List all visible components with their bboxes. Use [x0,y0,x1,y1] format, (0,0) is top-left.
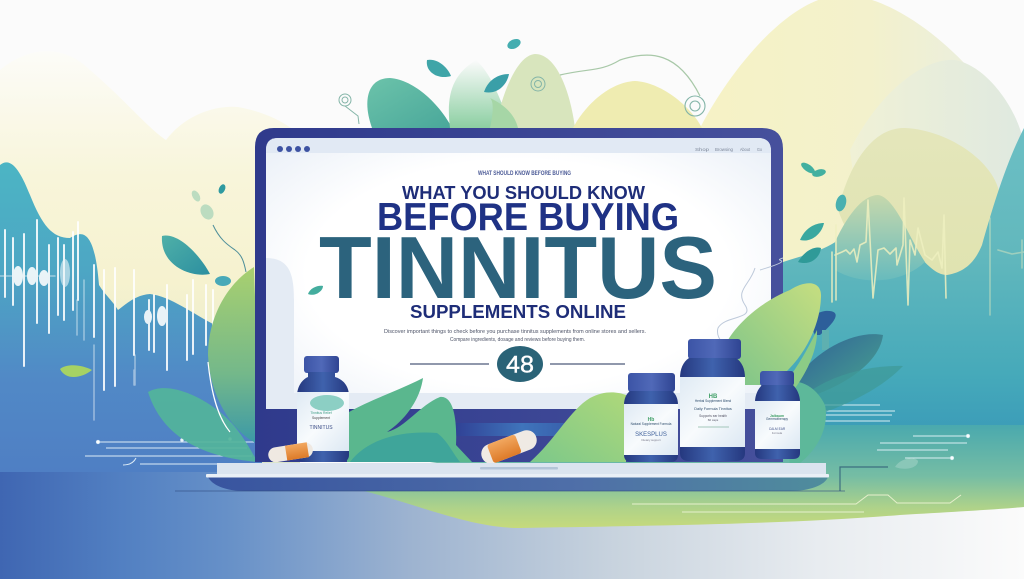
leaves floating left [60,183,246,377]
heartbeat wave right [832,198,1024,315]
title line 1: WHAT YOU SHOULD KNOW [402,183,645,203]
icon: small teal oval [215,276,231,286]
label [624,404,678,455]
bottle 2 [624,373,678,462]
screen lower frame panel [266,258,771,409]
browser menu: Shop [695,147,710,152]
label text: Gemmotherapy [766,417,788,421]
icon: oval leaf [834,193,848,213]
base top [217,463,826,475]
icon: teal leaf upper [800,223,824,241]
eyebrow text: WHAT SHOULD KNOW BEFORE BUYING [478,170,571,177]
screen [266,138,771,409]
label [680,377,745,447]
pale arch inside teal [835,195,925,280]
thin swirl [717,258,783,345]
decorative lines: right [818,405,970,460]
bottle 1 [297,356,349,462]
icon: sprout [799,161,827,178]
label text [309,411,333,431]
top plant cluster [339,37,705,128]
monitor chin band [446,423,636,436]
monitor [255,128,783,462]
olive hill [838,128,1000,280]
label text: Dietary support [642,438,661,442]
lime leaf in front of monitor [728,283,821,400]
ground shadow line [175,490,845,492]
icon: spiral right [685,96,705,116]
label text: Supplement [312,416,330,420]
title line 4: SUPPLEMENTS ONLINE [410,302,626,322]
background hills: left [0,51,300,470]
label mark [310,395,344,411]
circuit line [632,458,961,512]
label text: 60 caps [708,418,719,422]
icon: spiral centre [531,77,545,91]
pill left [267,441,314,463]
label text: Hb [648,417,654,423]
leaf front left [347,378,472,462]
label text [766,414,788,435]
small leaf on screen [308,286,323,295]
number badge: 48 [506,352,534,378]
icon: spiral left [339,94,359,124]
ground blue and white band [0,472,1024,579]
browser menu [695,147,762,152]
leaves floating right [798,161,848,263]
browser dots [277,146,310,152]
soundwave left [0,220,213,420]
base shadow [208,477,828,491]
background hills: right [640,0,1024,300]
body text: Compare ingredients, dosage and reviews before buying them. [450,337,585,343]
number badge [497,346,543,382]
icon: teal leaf small [506,37,522,51]
label text: CALM EAR [769,427,786,431]
bottle 4 [755,371,800,459]
curling stem [560,55,700,96]
stem [213,225,246,272]
body text: Discover important things to check before you purchase tinnitus supplements from online stores and sellers. [384,329,646,335]
icon: large teal leaf [162,236,210,275]
label [755,401,800,449]
monitor frame [255,128,783,462]
icon: teal leaf middle [484,74,509,93]
label text: HB [709,394,718,400]
icon: teal leaf top [427,60,451,77]
label text: SKESPLUS [635,432,667,438]
label text [694,394,732,422]
browser menu: Browsing [715,147,733,152]
icon: lime leaf [60,365,92,377]
trackpad slit [480,467,558,470]
label text: Herbal Supplement Blend [695,399,731,403]
label text: Jalbaum [770,414,784,418]
label text: Supports ear health [699,414,727,418]
label [297,392,349,451]
left blue wave mass [0,162,262,472]
label text: Formula [772,431,783,435]
body text [384,329,646,343]
icon: teal leaf lower [798,248,821,263]
title line 2: BEFORE BUYING [377,196,679,239]
label text: Natural Supplement Formula [631,422,672,426]
pill right [478,427,540,467]
plant behind monitor: left [148,267,260,462]
bottle 3 [680,339,745,461]
right teal wave mass [783,128,1024,440]
title line 3: TINNITUS [319,218,717,317]
browser menu: About [740,147,751,152]
laptop base [175,463,845,491]
icon: small dark leaf [217,183,227,195]
decorative lines: left [85,438,254,465]
divider lines [410,363,625,365]
browser bar [266,138,771,153]
icon: pale leaf pair [190,189,216,222]
leaf front right [530,392,626,462]
label text: Daily Formula Tinnitus [694,407,732,411]
plant behind monitor: right [785,311,903,470]
icon: small circuit leaf [895,458,918,469]
green ground [360,425,1024,528]
label text: Tinnitus Relief [310,411,332,415]
browser menu: Go [757,147,762,152]
label text [631,417,672,442]
base lip [206,474,829,478]
label text: TINNITUS [309,425,333,431]
